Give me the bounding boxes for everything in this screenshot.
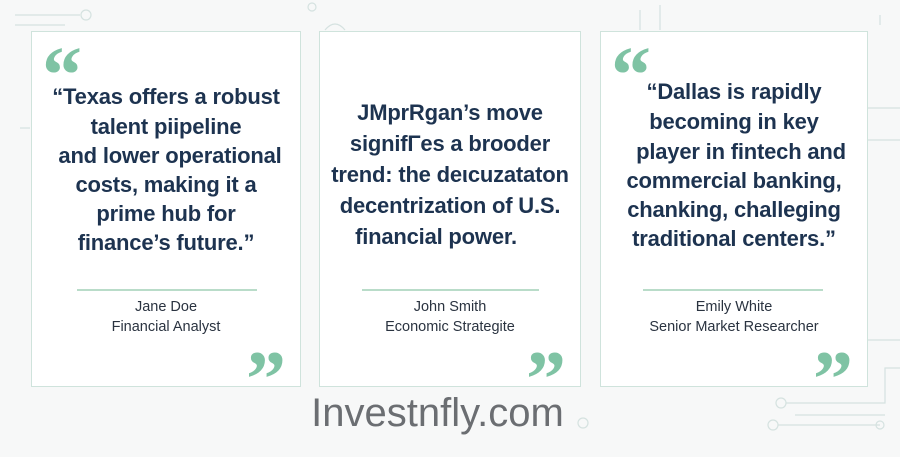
quote text: becoming in key xyxy=(649,109,819,134)
attribution: Senior Market Researcher xyxy=(649,319,819,335)
quote text: player in fintech and xyxy=(636,139,846,164)
quote text: and lower operational xyxy=(58,143,282,168)
attribution: Jane Doe xyxy=(135,299,197,315)
quote text: commercial banking, xyxy=(626,168,842,193)
icon: close quote: ” xyxy=(246,336,286,424)
attribution xyxy=(649,299,819,335)
attribution: Economic Strategite xyxy=(385,319,515,335)
quote text: JMprRgan’s move xyxy=(357,100,543,125)
quote text xyxy=(331,100,569,249)
icon: open quote: “ xyxy=(611,32,651,120)
icon: open quote: “ xyxy=(42,32,82,120)
attribution: Financial Analyst xyxy=(112,319,220,335)
quote text xyxy=(626,79,846,251)
quote text: financial power. xyxy=(355,224,517,249)
icon: close quote: ” xyxy=(813,336,853,424)
footer brand: Investnfly.com xyxy=(311,391,564,435)
icon: close quote: ” xyxy=(526,336,566,424)
quote text: signifΓes a brooder xyxy=(350,131,550,156)
attribution: Emily White xyxy=(696,299,772,315)
card: Emily White quote xyxy=(600,31,868,387)
quote text: costs, making it a xyxy=(75,172,256,197)
quote text: chanking, challeging xyxy=(627,197,841,222)
card: Jane Doe quote xyxy=(31,31,301,387)
attribution: John Smith xyxy=(414,299,486,315)
quote text: talent piipeline xyxy=(91,114,241,139)
attribution xyxy=(112,299,220,335)
quote text: traditional centers.” xyxy=(632,226,836,251)
quote text: decentrization of U.S. xyxy=(340,193,560,218)
quote text: finance’s future.” xyxy=(78,230,254,255)
quote text: prime hub for xyxy=(96,201,236,226)
quote text xyxy=(52,84,282,255)
quote text: “Texas offers a robust xyxy=(52,84,280,109)
quote text: “Dallas is rapidly xyxy=(647,79,821,104)
quote text: trend: the deιcuzataton xyxy=(331,162,569,187)
attribution xyxy=(385,299,515,335)
card: John Smith quote xyxy=(319,31,581,387)
